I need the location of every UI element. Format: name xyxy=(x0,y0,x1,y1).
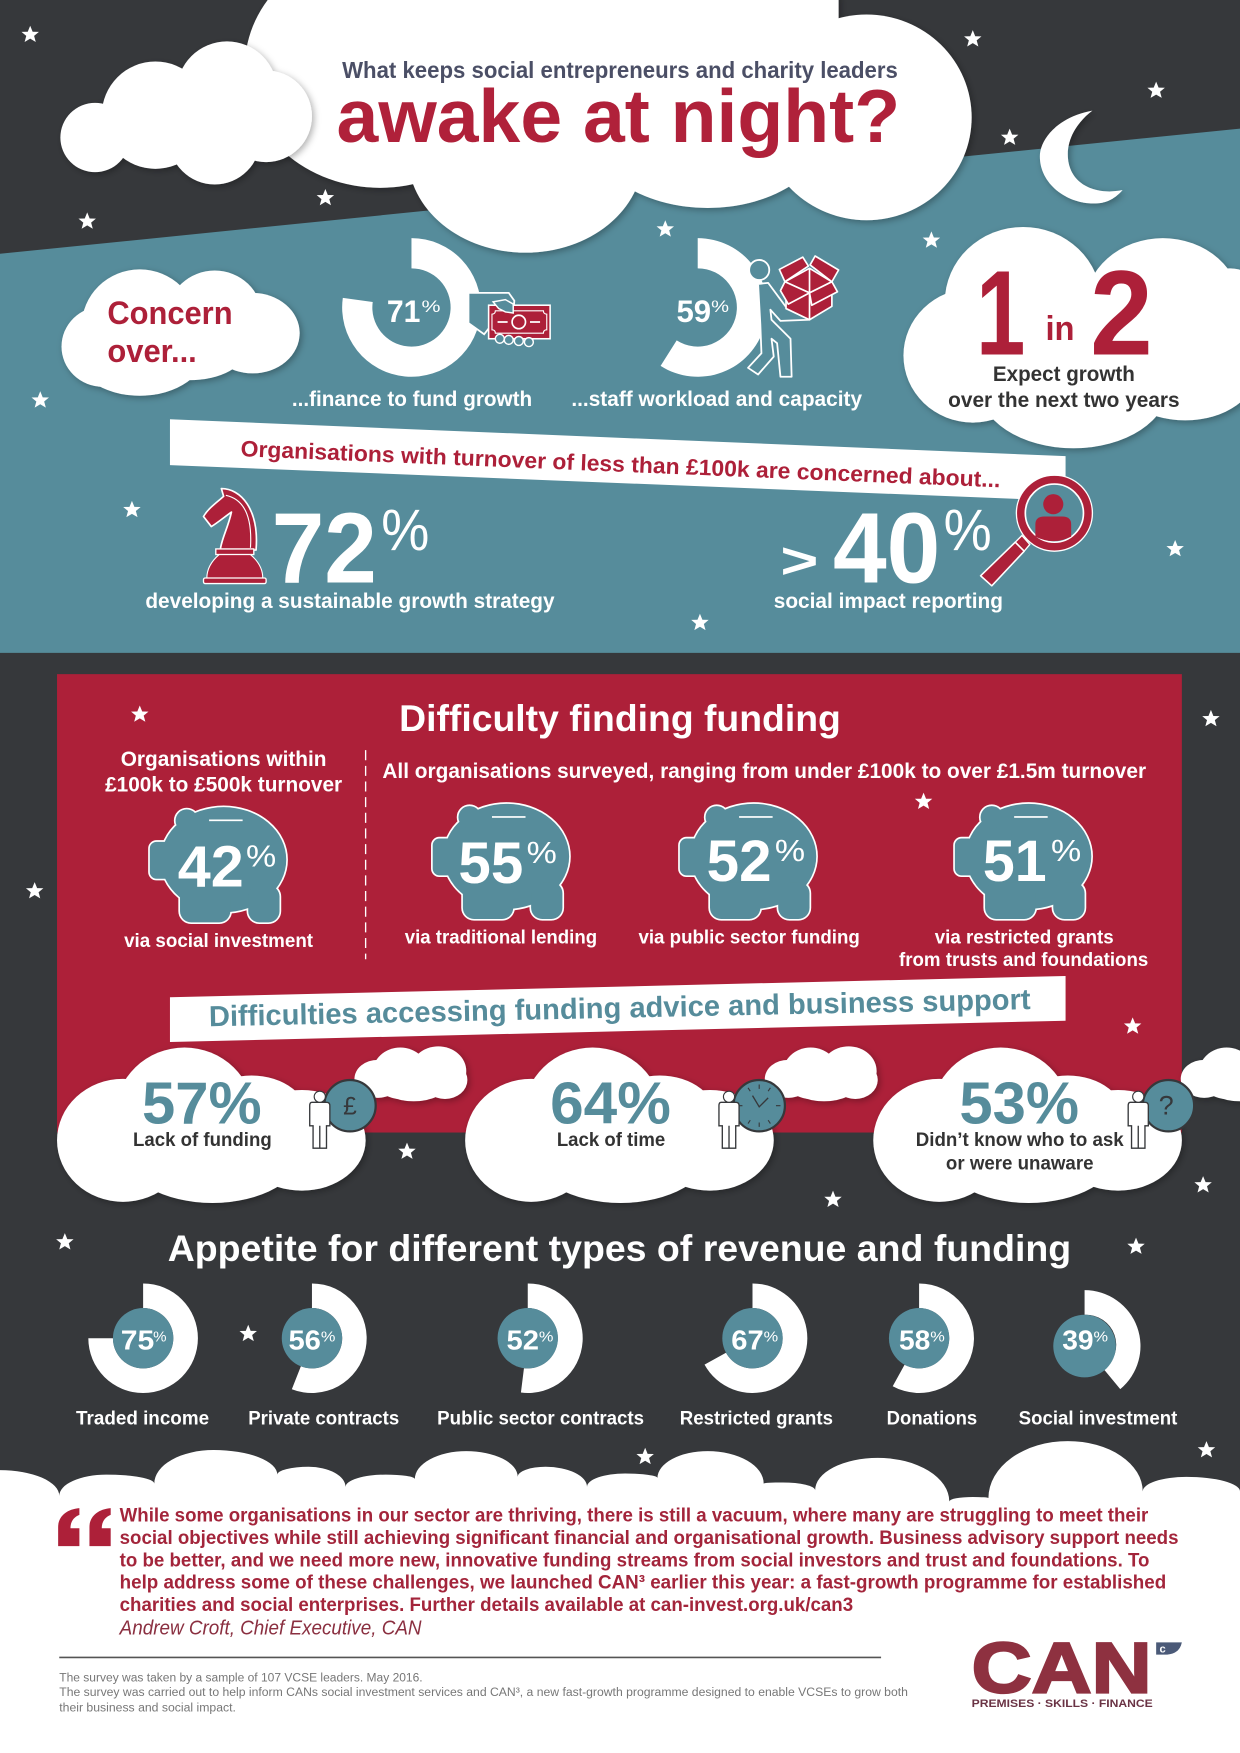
label: growth strategy: developing a sustainable growth strategy xyxy=(145,589,555,613)
sub-heading: all organisations: All organisations surveyed, ranging from under £100k to over £1.5m turnover xyxy=(382,759,1146,783)
label: via restricted grants: via restricted grants xyxy=(935,927,1114,949)
cloud: 57 percent lack of funding xyxy=(57,1048,366,1203)
label: via social investment: via social investment xyxy=(124,930,314,952)
icon: chess knight xyxy=(203,489,266,584)
label: social impact reporting: social impact reporting xyxy=(774,589,1003,613)
piggy bank: 52 percent: 52 xyxy=(707,829,772,894)
survey footnote: their business and social impact. xyxy=(59,1701,236,1715)
banner: funding advice difficulties: Difficulties accessing funding advice and business support xyxy=(209,984,1031,1033)
panel heading: Difficulty finding funding xyxy=(399,698,841,739)
cloud: 1 in 2: in xyxy=(1045,310,1075,348)
quote text: to be better, and we need more new, innovative funding streams from social investors and trust and foundations. To xyxy=(120,1550,1149,1571)
donut: 39 percent social investment: 39 xyxy=(1062,1324,1094,1355)
icon: person with pound coin: £ xyxy=(343,1094,357,1121)
logo: CAN: c xyxy=(1159,1643,1166,1655)
icon: person with pound coin xyxy=(310,1080,376,1148)
icon: person with question mark xyxy=(1128,1080,1194,1148)
quote text: social objectives while still achieving significant financial and organisational growth. Business advisory support needs xyxy=(120,1528,1179,1549)
donut: 58 percent donations: % xyxy=(930,1330,945,1346)
cloud: 1 in 2: 2 xyxy=(1090,245,1153,380)
label: finance to fund growth: ...finance to fund growth xyxy=(292,387,532,411)
piggy bank: 42 percent xyxy=(150,807,286,922)
donut: 56 percent private contracts: % xyxy=(321,1330,336,1346)
donut: 67 percent restricted grants: % xyxy=(764,1330,778,1346)
sub-heading: 100k to 500k: £100k to £500k turnover xyxy=(105,773,342,797)
label: public sector contracts: Public sector contracts xyxy=(437,1407,644,1429)
label: private contracts: Private contracts xyxy=(248,1407,399,1429)
donut: 52 percent public sector contracts xyxy=(498,1283,583,1393)
stars xyxy=(21,26,1220,1464)
piggy bank: 42 percent: 42 xyxy=(178,835,244,900)
donut: 75 percent traded income: % xyxy=(153,1330,167,1346)
donut: 75 percent traded income xyxy=(88,1283,198,1393)
cloud: 1 in 2: Expect growth xyxy=(993,362,1135,386)
stat: more than 40 percent: > xyxy=(780,531,818,589)
piggy bank: 51 percent: % xyxy=(1051,835,1081,868)
survey footnote: The survey was carried out to help inform CANs social investment services and CAN³, a new fast-growth programme designed to enable VCSEs to grow both xyxy=(59,1685,908,1699)
quotation mark xyxy=(58,1508,111,1546)
cloud: 53 percent did not know who to ask: 53% xyxy=(959,1070,1079,1137)
cloud: concern over: over... xyxy=(107,333,197,369)
cloud: 57 percent lack of funding: Lack of funding xyxy=(133,1129,272,1151)
label: via restricted grants xyxy=(899,927,1148,971)
donut: 56 percent private contracts: 56 xyxy=(288,1324,321,1355)
icon: hand holding banknote xyxy=(465,293,550,347)
title cloud xyxy=(245,0,972,253)
banner: turnover under 100k: Organisations with turnover of less than £100k are concerned about... xyxy=(240,436,1001,492)
donut: 59 percent staff: 59 xyxy=(676,294,711,329)
logo: CAN: PREMISES · SKILLS · FINANCE xyxy=(972,1698,1153,1710)
title intro line: What keeps social entrepreneurs and charity leaders xyxy=(342,57,898,83)
cloud: concern over xyxy=(61,269,300,396)
panel: difficulty finding funding xyxy=(57,674,1182,1133)
quote text: charities and social enterprises. Further details available at can-invest.org.uk/can3 xyxy=(120,1595,853,1616)
cloud: 57 percent lack of funding: 57% xyxy=(142,1070,262,1137)
label: traded income: Traded income xyxy=(76,1407,209,1429)
cloud: 1 in 2: over the next two years xyxy=(948,388,1180,412)
small cloud behind time stat xyxy=(765,1046,878,1101)
label: via public sector funding: via public sector funding xyxy=(638,927,860,949)
donut: 67 percent restricted grants: 67 xyxy=(731,1324,764,1355)
donut: 58 percent donations xyxy=(889,1283,974,1393)
quote text: help address some of these challenges, we launched CAN³ earlier this year: a fast-growth programme for established xyxy=(120,1573,1166,1594)
donut: 58 percent donations: 58 xyxy=(899,1324,930,1355)
background: teal band xyxy=(0,129,1240,653)
small cloud beside title xyxy=(60,41,312,184)
donut: 59 percent staff xyxy=(661,238,767,377)
stat: more than 40 percent xyxy=(780,492,992,604)
icon: person carrying box xyxy=(748,256,839,377)
cloud: 53 percent did not know who to ask: Didn’t know who to ask xyxy=(916,1129,1124,1151)
piggy bank: 55 percent xyxy=(433,804,569,919)
label: donations: Donations xyxy=(887,1407,977,1429)
piggy bank: 51 percent: 51 xyxy=(983,829,1047,894)
banner: funding advice difficulties xyxy=(170,976,1066,1042)
title: awake at night: awake at night? xyxy=(337,74,900,158)
donut: 52 percent public sector contracts: 52 xyxy=(507,1324,539,1355)
icon: person with question mark: ? xyxy=(1159,1091,1174,1121)
stat: 72 percent: 72 xyxy=(272,492,377,604)
sub-heading: 100k to 500k: Organisations within xyxy=(121,747,326,771)
donut: 59 percent staff: % xyxy=(711,297,729,316)
stat: more than 40 percent: % xyxy=(944,498,992,563)
donut: 39 percent social investment: % xyxy=(1094,1330,1108,1346)
sub-heading: 100k to 500k xyxy=(105,747,342,797)
stat: more than 40 percent: 40 xyxy=(833,492,940,604)
moon xyxy=(1040,111,1123,204)
label: staff workload and capacity: ...staff workload and capacity xyxy=(571,387,862,411)
logo: CAN: CAN xyxy=(972,1629,1152,1709)
piggy bank: 52 percent xyxy=(680,804,816,919)
donut: 52 percent public sector contracts: % xyxy=(539,1330,554,1346)
quote text: While some organisations in our sector are thriving, there is still a vacuum, where many are struggling to meet their xyxy=(120,1506,1149,1527)
donut: 39 percent social investment xyxy=(1053,1290,1140,1389)
donut: 67 percent restricted grants xyxy=(705,1283,807,1393)
label: via restricted grants: from trusts and foundations xyxy=(899,949,1148,971)
banner: turnover under 100k xyxy=(170,419,1066,501)
small cloud behind unaware stat xyxy=(1181,1046,1240,1101)
quote text xyxy=(120,1506,1179,1616)
quote attribution: Andrew Croft, Chief Executive, CAN xyxy=(119,1617,422,1639)
cloud: 1 in 2: 1 xyxy=(976,245,1025,380)
cloud: concern over: Concern xyxy=(107,295,233,331)
footer cloud xyxy=(0,1441,1240,1753)
donut: 71 percent finance: 71 xyxy=(387,294,420,329)
icon: person with clock xyxy=(719,1080,785,1148)
cloud: 53 percent did not know who to ask: or were unaware xyxy=(946,1152,1094,1174)
label: restricted grants: Restricted grants xyxy=(680,1407,833,1429)
piggy bank: 51 percent xyxy=(955,804,1091,919)
donut: 71 percent finance: % xyxy=(422,297,441,316)
piggy bank: 52 percent: % xyxy=(775,835,805,868)
donut: 75 percent traded income: 75 xyxy=(121,1324,154,1355)
label: social investment: Social investment xyxy=(1019,1407,1178,1429)
piggy bank: 42 percent: % xyxy=(246,840,276,873)
piggy bank: 55 percent: % xyxy=(527,837,557,870)
icon: magnifier with person xyxy=(981,475,1092,586)
cloud: 64 percent lack of time: 64% xyxy=(550,1070,671,1137)
survey footnote xyxy=(59,1670,908,1715)
piggy bank: 55 percent: 55 xyxy=(458,831,523,896)
small cloud behind funding stat xyxy=(354,1046,467,1101)
cloud: 1 in 2 xyxy=(903,227,1240,448)
donut: 71 percent finance xyxy=(342,238,481,377)
survey footnote: The survey was taken by a sample of 107 VCSE leaders. May 2016. xyxy=(59,1670,423,1684)
cloud: 64 percent lack of time xyxy=(465,1048,774,1203)
label: via traditional lending: via traditional lending xyxy=(405,927,597,949)
cloud: 53 percent did not know who to ask xyxy=(873,1048,1182,1203)
cloud: 64 percent lack of time: Lack of time xyxy=(557,1129,665,1151)
heading: appetite for revenue and funding: Appetite for different types of revenue and funding xyxy=(168,1227,1071,1269)
donut: 56 percent private contracts xyxy=(282,1283,367,1393)
stat: 72 percent: % xyxy=(381,498,429,563)
